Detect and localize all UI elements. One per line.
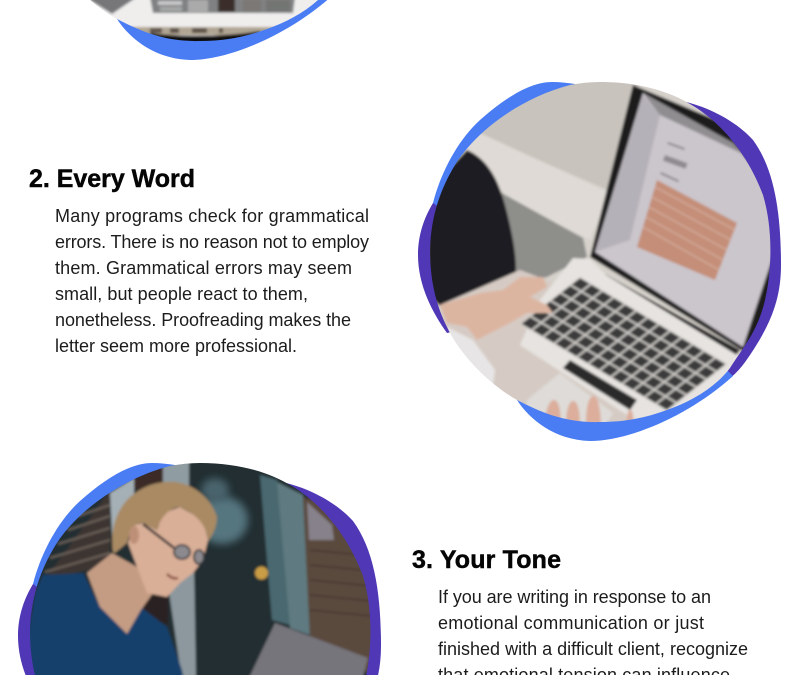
- blob backing: blue: [33, 463, 333, 675]
- blob backing: purple: [18, 481, 381, 675]
- heading: 3. Your Tone: 3. Your Tone: [412, 546, 561, 574]
- blob backing: blue: [433, 82, 733, 441]
- section 3 image blob: man with laptop: [18, 455, 381, 675]
- text block: Your Tone body: [438, 587, 748, 675]
- text block: Every Word body: Many programs check for grammatical: [55, 206, 369, 226]
- blob backing: purple: [418, 100, 781, 380]
- text block: Every Word body: nonetheless. Proofreading makes the: [55, 310, 351, 330]
- text block: Your Tone body: finished with a difficult client, recognize: [438, 639, 748, 659]
- text block: Every Word body: letter seem more professional.: [55, 336, 297, 356]
- text block: Your Tone body: If you are writing in response to an: [438, 587, 711, 607]
- photo: hands typing on laptop: [430, 82, 770, 422]
- text block: Every Word body: small, but people react to them,: [55, 284, 308, 304]
- text block: Every Word body: errors. There is no reason not to employ: [55, 232, 369, 252]
- section 1 image blob: [90, 0, 328, 60]
- blob backing: blue: [33, 0, 333, 60]
- text block: Your Tone body: emotional communication or just: [438, 613, 704, 633]
- heading: 2. Every Word: 2. Every Word: [29, 165, 195, 193]
- text block: Every Word body: [55, 206, 369, 356]
- section 2 image blob: laptop with document: [418, 75, 790, 441]
- photo: laptop keyboard edge: [90, 0, 318, 42]
- photo: smiling man with glasses: [20, 455, 380, 675]
- text block: Every Word body: them. Grammatical errors may seem: [55, 258, 352, 278]
